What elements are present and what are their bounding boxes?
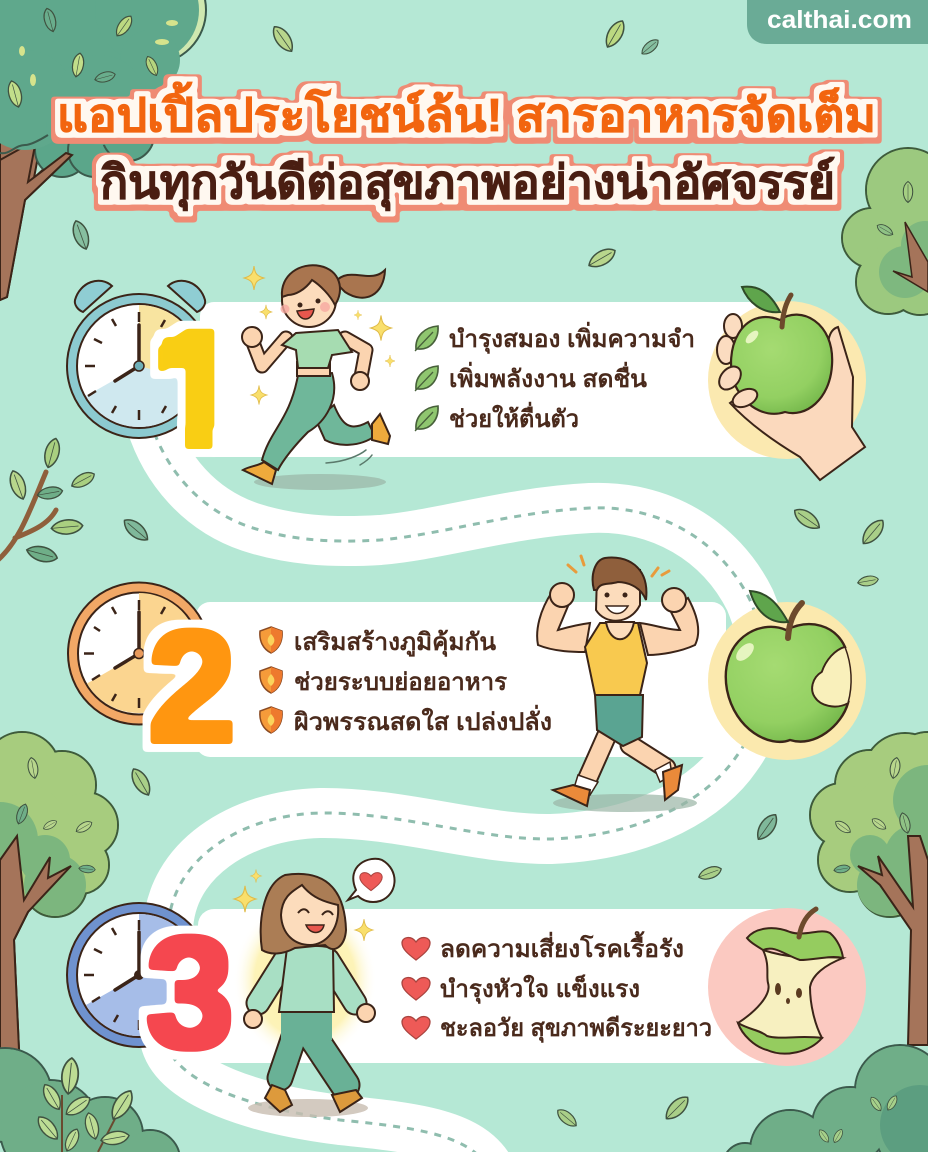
number 1: 1 bbox=[150, 297, 242, 482]
tree: bottom left bbox=[0, 732, 118, 1050]
speech bubble with heart bbox=[348, 859, 395, 902]
title bbox=[57, 81, 876, 211]
list: row 2 benefits: ผิวพรรณสดใส เปล่งปลั่ง bbox=[294, 704, 552, 736]
bush: bottom right bbox=[723, 1045, 928, 1152]
list: row 3 benefits: บำรุงหัวใจ แข็งแรง bbox=[440, 974, 640, 1005]
panel: row 2 band bbox=[196, 602, 726, 757]
apple core bbox=[708, 908, 866, 1066]
tree: top right bbox=[842, 148, 928, 315]
list: row 3 benefits: ลดความเสี่ยงโรคเรื้อรัง bbox=[440, 930, 684, 963]
bush: bottom left bbox=[0, 1048, 180, 1152]
list: row 1 benefits: เพิ่มพลังงาน สดชื่น bbox=[449, 361, 648, 393]
winding road bbox=[150, 420, 766, 1152]
list: row 2 benefits bbox=[260, 627, 552, 736]
apple in hand bbox=[708, 287, 866, 480]
figure: happy walking woman bbox=[233, 859, 395, 1117]
figure: flexing man bbox=[537, 556, 698, 812]
tree: top left bbox=[0, 0, 206, 300]
clock 3 bbox=[67, 903, 211, 1047]
tree: bottom right bbox=[810, 732, 928, 1045]
panel: row 1 band bbox=[200, 302, 785, 457]
list: row 1 benefits: ช่วยให้ตื่นตัว bbox=[449, 401, 579, 433]
list: row 2 benefits: เสริมสร้างภูมิคุ้มกัน bbox=[294, 629, 497, 658]
number 2: 2 bbox=[148, 599, 236, 775]
site badge: calthai.com bbox=[767, 6, 912, 34]
title: กินทุกวันดีต่อสุขภาพอย่างน่าอัศจรรย์ bbox=[100, 156, 835, 211]
number 3: 3 bbox=[146, 905, 234, 1081]
number 1 bbox=[150, 320, 214, 457]
list: row 3 benefits: ชะลอวัย สุขภาพดีระยะยาว bbox=[440, 1015, 712, 1044]
branch: left twig bbox=[0, 437, 97, 565]
list: row 2 benefits: ช่วยระบบย่อยอาหาร bbox=[294, 669, 507, 696]
clock 1 bbox=[67, 281, 211, 438]
apple with bite bbox=[708, 591, 866, 760]
title: แอปเปิ้ลประโยชน์ล้น! สารอาหารจัดเต็ม bbox=[57, 81, 876, 141]
site badge bbox=[747, 0, 928, 44]
list: row 1 benefits bbox=[415, 321, 695, 433]
list: row 3 benefits bbox=[402, 930, 712, 1044]
panel: row 3 band bbox=[198, 909, 795, 1063]
list: row 1 benefits: บำรุงสมอง เพิ่มความจำ bbox=[449, 321, 695, 355]
clock 2 bbox=[68, 582, 210, 724]
figure: runner bbox=[242, 265, 395, 490]
